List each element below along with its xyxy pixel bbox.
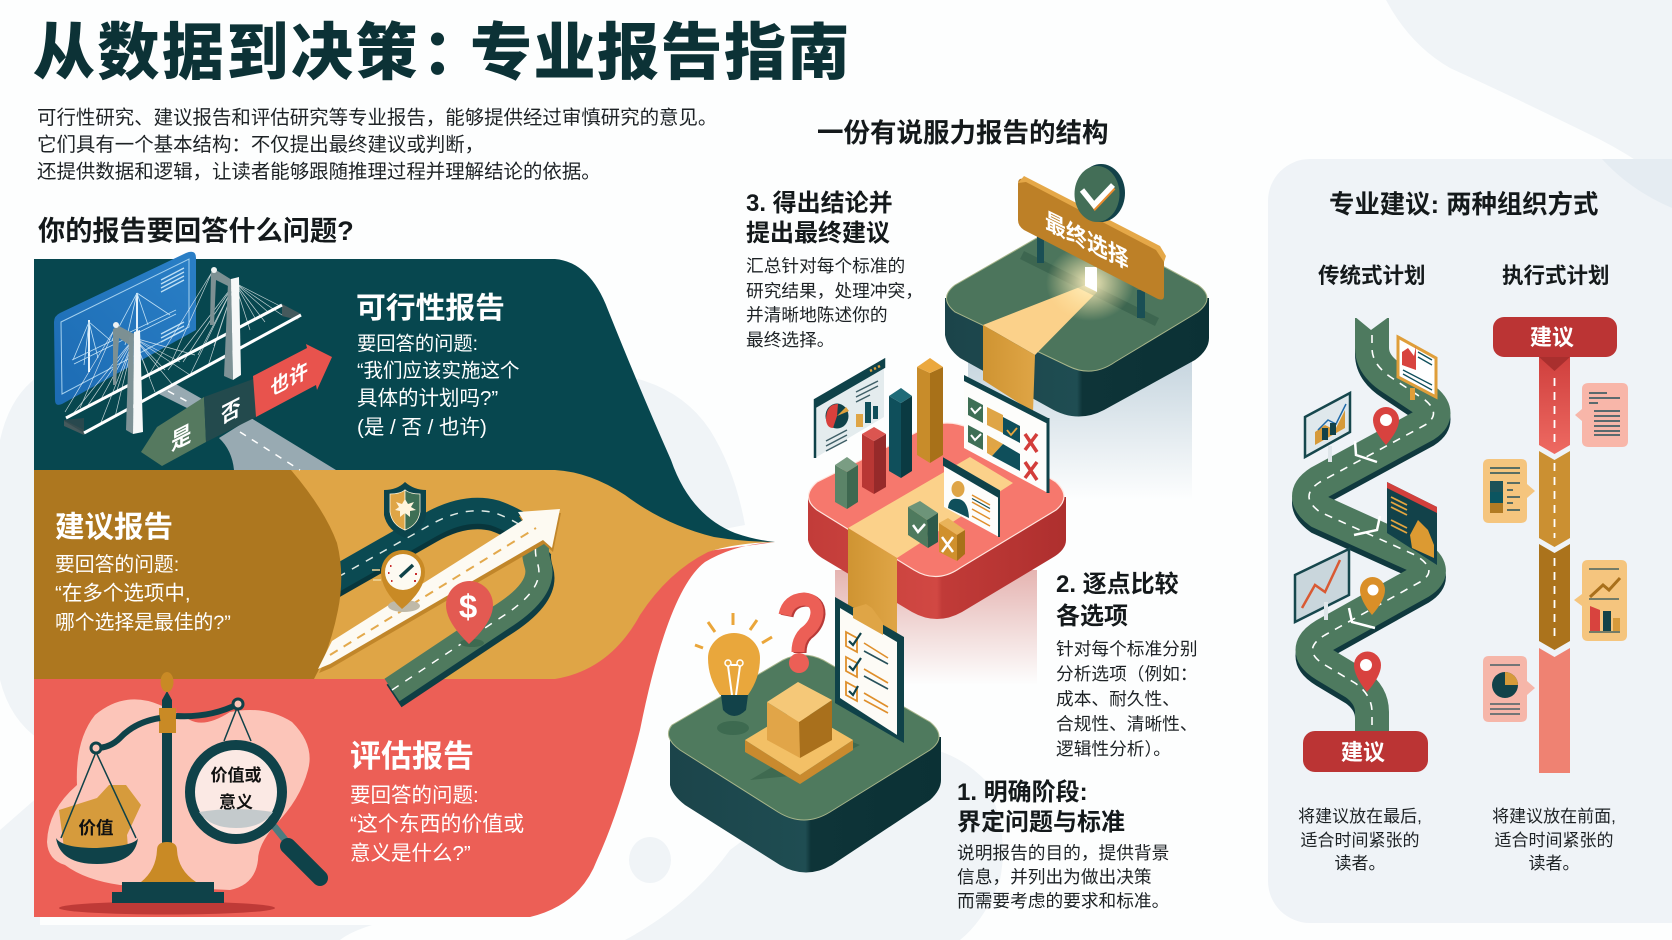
final choice sign [1018,176,1166,300]
feasibility report text: (是 / 否 / 也许) [357,416,487,439]
icon: road under bridge [157,383,336,470]
caption: executive plan: 将建议放在前面, [1492,807,1616,826]
step 2 text: 合规性、清晰性、 [1056,714,1198,734]
intro text: 它们具有一个基本结构：不仅提出最终建议或判断， [37,134,484,156]
road sign: dark dashboard [1387,482,1437,565]
heading: report questions: 你的报告要回答什么问题? [38,215,354,246]
panel: two organization styles [1268,159,1672,923]
panel heading: 专业建议: 两种组织方式 [1329,190,1598,219]
icon: blueprint board [54,252,196,405]
feasibility report text: “我们应该实施这个 [357,360,520,382]
feasibility report text: 具体的计划吗?” [357,387,498,410]
funnel band: gold recommendation [34,470,775,679]
title: ： [422,2,484,92]
icon: gold cube on plinth [745,682,860,784]
shadow under top platform [968,350,1192,500]
step 2 text [1056,571,1198,759]
evaluation report text: 意义是什么?” [350,842,471,865]
icon: clipboard [835,597,904,743]
sign labels: 也许 [270,359,308,401]
swallowtail notch of road [1354,316,1390,330]
icon: gauge pin [372,550,425,612]
feasibility report text: 可行性报告 [356,292,505,325]
intro text: 可行性研究、建议报告和评估研究等专业报告，能够提供经过审慎研究的意见。 [37,107,717,129]
column heading: traditional: 传统式计划 [1318,263,1426,288]
icon: decision arrow sign [141,344,332,466]
caption: executive plan [1492,807,1616,873]
bar segment: pale coral [1539,648,1570,773]
front tower [113,326,134,385]
icon: red map pin [1373,407,1399,445]
icon: white arrow [319,513,561,673]
small check and cross boxes [908,501,965,561]
post shadow [1022,255,1157,322]
callout: table notes [1483,459,1535,523]
icon: dollar pin: $ [459,588,477,625]
step 2 text: 分析选项（例如： [1056,664,1198,684]
title: 专业报告指南 [470,19,851,88]
step 2 text: 针对每个标准分别 [1056,639,1198,659]
step 1 text: 信息，并列出为做出决策 [957,867,1152,887]
bar segment: gold [1539,451,1570,547]
recommendation box at road end [1303,731,1428,772]
caption: executive plan: 适合时间紧张的 [1494,831,1614,850]
callout: growth chart [1574,560,1627,641]
platform 1: define [668,597,941,872]
sign posts [1037,235,1145,318]
base shadow [59,902,275,914]
icon: light bulb [695,613,772,735]
step 1 text: 而需要考虑的要求和标准。 [957,891,1169,911]
step 3 text: 最终选择。 [746,330,834,350]
illustration: balance scale and magnifier [47,672,320,914]
checklist panel [964,375,1048,493]
funnel band: coral evaluation [34,542,775,917]
chart panel [815,360,884,458]
evaluation report text: “这个东西的价值或 [350,813,524,836]
executive plan segmented bar [1539,357,1570,773]
callout: text notes [1575,383,1628,447]
callout: pie chart [1483,656,1535,722]
step 3 text [746,190,923,350]
gold nugget and pan: 价值 [78,818,114,838]
title: 从数据到决策 [33,19,420,88]
cream path on platform 2 [848,457,1013,558]
step 3 text: 研究结果，处理冲突， [746,281,923,301]
sign labels: 是 [171,419,191,456]
road sign: rising chart board [1295,549,1349,622]
caption: traditional plan [1298,807,1422,873]
feasibility report text [356,292,520,439]
step 1 text: 1. 明确阶段: [957,778,1088,806]
step 2 text: 逻辑性分析）。 [1056,739,1171,759]
recommendation report text: 要回答的问题: [55,554,179,576]
sign labels [171,359,308,456]
person card [944,459,999,537]
magnifier: 价值或 [210,765,262,785]
step 1 text [957,778,1169,911]
rear tower [210,270,232,325]
evaluation report text [350,739,524,865]
caption: traditional plan: 读者。 [1334,854,1386,873]
caption: traditional plan: 将建议放在最后, [1298,807,1422,826]
magnifier: 意义 [219,792,253,812]
step 2 text: 成本、耐久性、 [1056,689,1180,709]
evaluation report text: 评估报告 [350,739,474,774]
icon: red end pin [1354,652,1381,692]
step 1 text: 说明报告的目的，提供背景 [957,843,1169,863]
icon: green road [392,538,542,696]
bar segment: coral top [1539,357,1570,454]
road sign: line chart board [1305,393,1350,462]
step 3 text: 并清晰地陈述你的 [746,305,888,325]
intro text [37,107,717,183]
final choice sign: 最终选择 [1045,207,1129,275]
shadow under middle platform [835,570,1037,685]
recommendation report text: “在多个选项中, [55,582,191,605]
funnel of three report types [34,259,775,917]
platform 2: comparison [808,358,1066,640]
feasibility report text: 要回答的问题: [357,333,478,355]
heading: report structure: 一份有说服力报告的结构 [817,118,1108,148]
icon: bridge deck and towers [64,267,301,435]
bar segment: dark gold [1539,544,1570,650]
step 2 text: 2. 逐点比较 [1056,571,1179,598]
icon: gold map pin [1360,577,1385,615]
recommendation report text: 建议报告 [55,511,173,544]
gold nugget and pan [56,752,141,864]
column heading: executive: 执行式计划 [1502,264,1610,288]
recommendation report text [55,511,231,634]
icon: dollar pin [446,581,493,647]
icon: check badge [1074,164,1125,222]
step 2 text: 各选项 [1056,602,1128,630]
magnifier [190,745,320,878]
caption: traditional plan: 适合时间紧张的 [1300,831,1420,850]
funnel band: teal feasibility [34,259,775,560]
gold path onto platform 3 [983,285,1097,355]
recommendation box at road end: 建议 [1341,740,1385,765]
intro text: 还提供数据和逻辑，让读者能够跟随推理过程并理解结论的依据。 [37,161,601,183]
road sign: bar chart board [1398,337,1436,400]
caption: executive plan: 读者。 [1528,854,1580,873]
recommendation box at bar top: 建议 [1530,325,1574,350]
platform 3: final choice [945,164,1209,417]
icon: dark teal route [330,511,530,587]
step 3 text: 提出最终建议 [746,220,890,247]
step 1 text: 界定问题与标准 [957,809,1125,836]
scale stand [91,672,251,903]
gold band left dark panel [34,470,341,679]
winding road [1309,318,1434,738]
gold path between platforms [848,528,897,640]
illustration: bridge and decision sign [54,252,336,470]
icon: shield [384,482,426,538]
evaluation report text: 要回答的问题: [350,784,479,807]
recommendation box at bar top [1493,317,1617,371]
illustration: three routes [318,482,561,696]
step 3 text: 汇总针对每个标准的 [746,256,905,276]
sign labels: 否 [221,394,241,429]
recommendation report text: 哪个选择是最佳的?” [55,612,231,634]
icon: question mark [785,599,819,673]
bar chart [835,358,943,509]
pink blob behind scale [47,699,310,890]
step 3 text: 3. 得出结论并 [746,190,893,217]
